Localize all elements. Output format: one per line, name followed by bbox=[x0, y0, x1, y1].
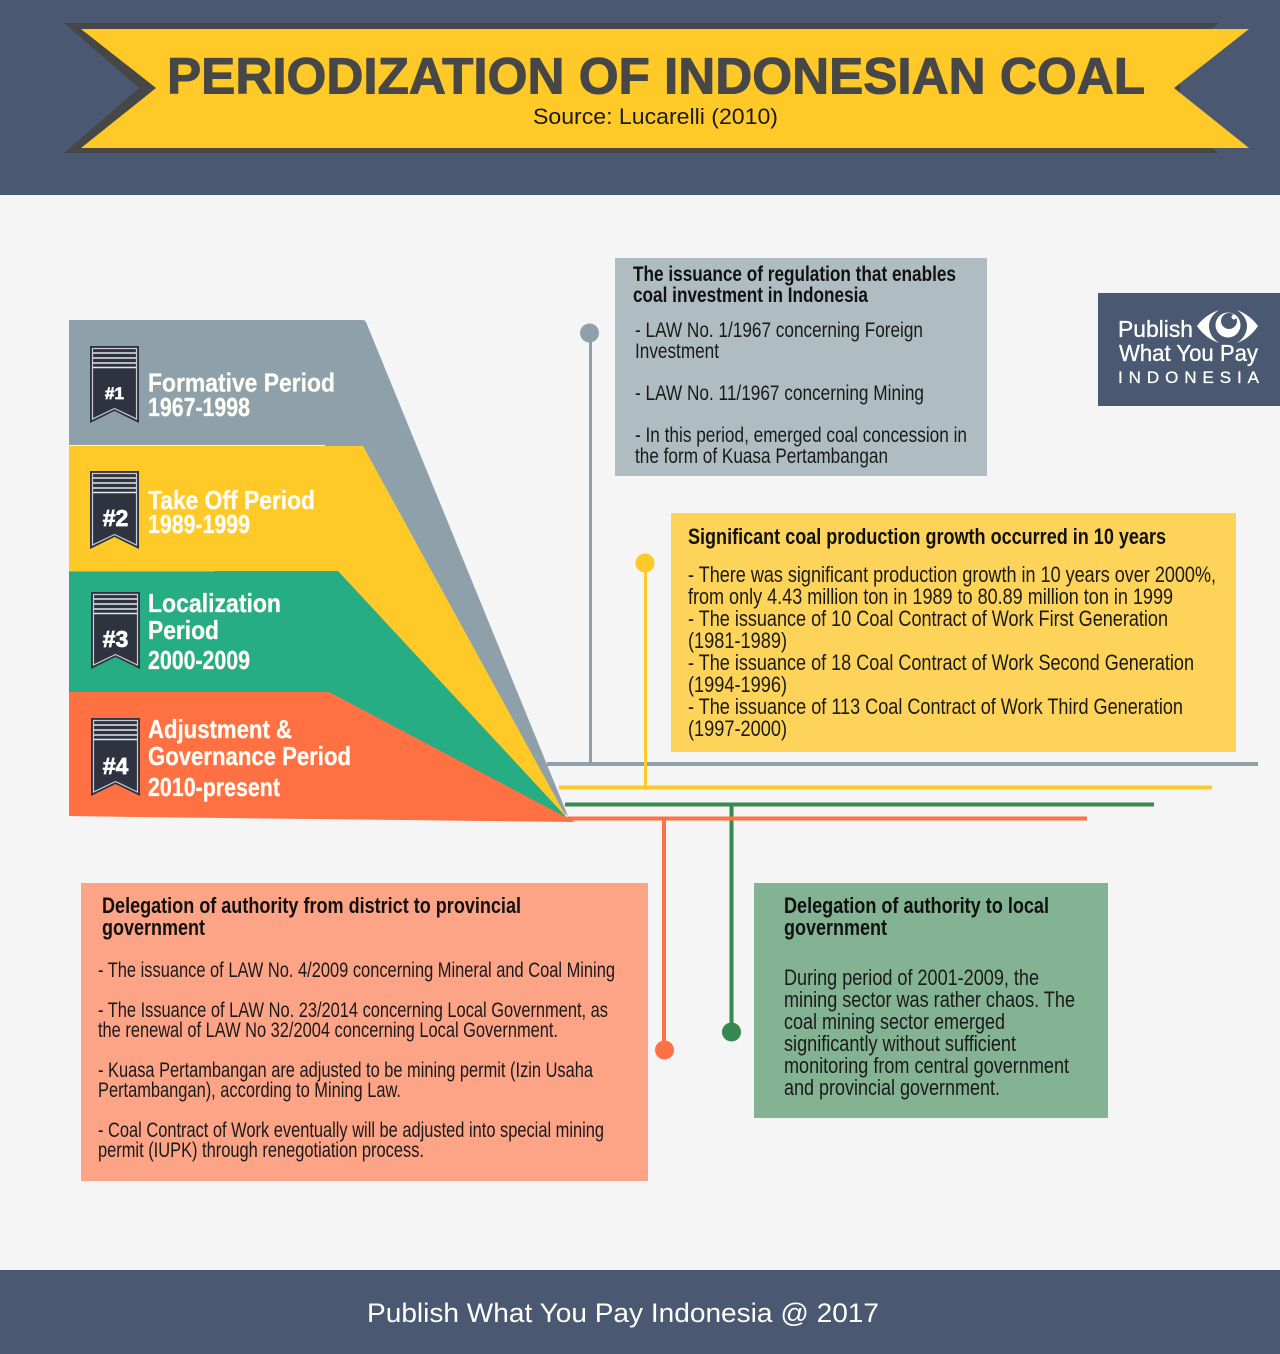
body text: the form of Kuasa Pertambangan bbox=[635, 445, 888, 468]
body text: Pertambangan), according to Mining Law. bbox=[98, 1079, 401, 1102]
label: localization period: Period bbox=[148, 615, 219, 645]
body text: monitoring from central government bbox=[784, 1053, 1069, 1078]
body text: coal mining sector emerged bbox=[784, 1009, 1005, 1034]
body text: from only 4.43 million ton in 1989 to 80.89 million ton in 1999 bbox=[688, 584, 1173, 609]
logo: Publish What You Pay Indonesia: What You Pay bbox=[1119, 340, 1258, 366]
body text: (1981-1989) bbox=[688, 628, 787, 653]
label: take off period: Take Off Period bbox=[148, 485, 315, 515]
label: adjustment and governance period bbox=[148, 714, 351, 802]
body text: significantly without sufficient bbox=[784, 1031, 1016, 1056]
source line: Source: Lucarelli (2010) bbox=[533, 104, 778, 129]
body text: - The issuance of 10 Coal Contract of Work First Generation bbox=[688, 606, 1168, 631]
body text: (1997-2000) bbox=[688, 716, 787, 741]
banner ribbon bbox=[64, 23, 1249, 153]
body text: and provincial government. bbox=[784, 1075, 1000, 1100]
badge 4 bbox=[91, 718, 140, 796]
body text: Investment bbox=[635, 340, 719, 363]
heading: Significant coal production growth occurred in 10 years bbox=[688, 524, 1166, 549]
badge 1 bbox=[90, 346, 139, 423]
funnel: four period wedges bbox=[69, 320, 575, 822]
footer text: Publish What You Pay Indonesia @ 2017 bbox=[367, 1298, 879, 1328]
body text bbox=[635, 319, 967, 468]
wedge: localization period bbox=[69, 571, 570, 821]
label: formative period bbox=[148, 368, 335, 422]
connector: yellow timeline bbox=[559, 554, 1212, 790]
connector: gray timeline bbox=[547, 324, 1258, 766]
body text: mining sector was rather chaos. The bbox=[784, 987, 1075, 1012]
icon: eye bbox=[1197, 310, 1258, 343]
badge 4: #4 bbox=[103, 753, 128, 779]
heading bbox=[633, 263, 956, 307]
body text: During period of 2001-2009, the bbox=[784, 965, 1039, 990]
label: take off period: 1989-1999 bbox=[148, 509, 250, 539]
panel: formative period details bbox=[615, 258, 987, 476]
badge 1: #1 bbox=[105, 384, 124, 403]
heading: government bbox=[102, 915, 206, 940]
heading: Delegation of authority from district to provincial bbox=[102, 893, 521, 918]
label: localization period bbox=[148, 588, 281, 675]
body text: - LAW No. 1/1967 concerning Foreign bbox=[635, 319, 923, 342]
connector: orange timeline bbox=[567, 816, 1087, 1060]
header band bbox=[0, 0, 1280, 195]
body text bbox=[688, 562, 1216, 741]
body text: - Coal Contract of Work eventually will be adjusted into special mining bbox=[98, 1119, 604, 1142]
body text: permit (IUPK) through renegotiation process. bbox=[98, 1139, 424, 1162]
body text: (1994-1996) bbox=[688, 672, 787, 697]
panel: localization period details bbox=[754, 883, 1108, 1118]
label: adjustment and governance period: 2010-present bbox=[148, 772, 280, 802]
label: localization period: 2000-2009 bbox=[148, 645, 250, 675]
body text: - The issuance of 113 Coal Contract of Work Third Generation bbox=[688, 694, 1183, 719]
body text: the renewal of LAW No 32/2004 concerning Local Government. bbox=[98, 1019, 558, 1042]
logo: Publish What You Pay Indonesia bbox=[1098, 293, 1280, 406]
heading bbox=[102, 893, 521, 940]
wedge: formative period bbox=[69, 320, 568, 816]
body text: - LAW No. 11/1967 concerning Mining bbox=[635, 382, 924, 405]
body text bbox=[784, 965, 1075, 1100]
badge 2: #2 bbox=[103, 505, 128, 531]
label: formative period: Formative Period bbox=[148, 368, 335, 398]
label: formative period: 1967-1998 bbox=[148, 392, 250, 422]
badge 2 bbox=[90, 471, 139, 549]
heading bbox=[784, 893, 1049, 940]
heading: coal investment in Indonesia bbox=[633, 284, 868, 307]
wedge: take off period bbox=[69, 446, 568, 820]
body text: - The Issuance of LAW No. 23/2014 concerning Local Government, as bbox=[98, 999, 608, 1022]
body text: - The issuance of LAW No. 4/2009 concerning Mineral and Coal Mining bbox=[98, 959, 615, 982]
wedge: adjustment and governance period bbox=[69, 692, 575, 822]
label: localization period: Localization bbox=[148, 588, 281, 618]
heading: Delegation of authority to local bbox=[784, 893, 1049, 918]
badge 3: #3 bbox=[103, 626, 128, 652]
heading: government bbox=[784, 915, 888, 940]
label: adjustment and governance period: Governance Period bbox=[148, 741, 351, 771]
body text: - In this period, emerged coal concession in bbox=[635, 424, 967, 447]
heading: The issuance of regulation that enables bbox=[633, 263, 956, 286]
panel: adjustment period details bbox=[81, 883, 648, 1181]
logo: Publish What You Pay Indonesia: INDONESIA bbox=[1118, 368, 1260, 387]
badge 3 bbox=[91, 592, 140, 669]
label: take off period bbox=[148, 485, 315, 539]
label: adjustment and governance period: Adjustment & bbox=[148, 714, 292, 744]
body text bbox=[98, 959, 615, 1162]
panel: take off period details bbox=[671, 513, 1236, 752]
title: PERIODIZATION OF INDONESIAN COAL bbox=[167, 48, 1145, 104]
connector: green timeline bbox=[565, 802, 1154, 1042]
body text: - Kuasa Pertambangan are adjusted to be mining permit (Izin Usaha bbox=[98, 1059, 593, 1082]
logo: Publish What You Pay Indonesia: Publish bbox=[1118, 316, 1193, 342]
footer band bbox=[0, 1270, 1280, 1354]
